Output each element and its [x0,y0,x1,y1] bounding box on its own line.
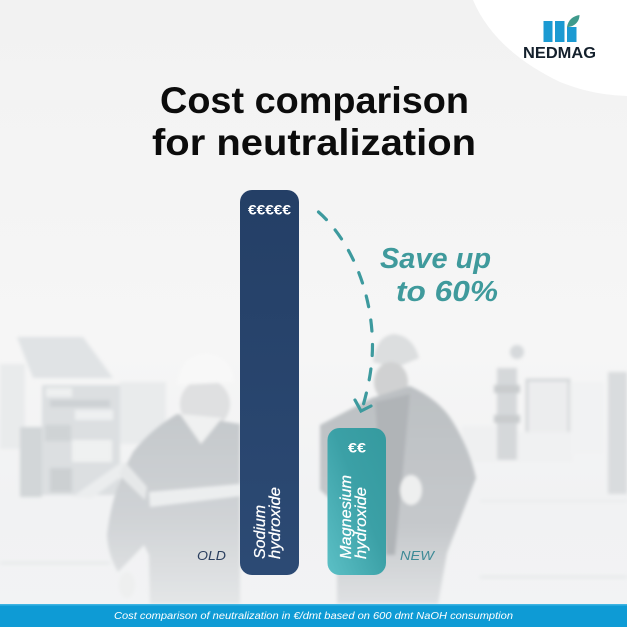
title: for neutralization [152,122,476,163]
arrow: dashed curve from old to new [318,212,372,411]
title: Cost comparison [160,80,469,121]
photo: right plant equipment [462,345,627,494]
white corner panel with logo [473,0,627,96]
footnote: Cost comparison of neutralization in €/dmt based on 600 dmt NaOH consumption [114,611,513,622]
bar label [338,475,370,559]
bar label: hydroxide [267,487,284,559]
callout: save up to 60%: to 60% [396,276,498,308]
background photo: industrial site with two workers [0,334,627,604]
label: new: NEW [400,548,436,563]
callout: save up to 60% [380,243,498,308]
bar label: hydroxide [353,487,370,559]
bar label: Magnesium [338,475,355,559]
label: old: OLD [197,548,226,563]
icon: Nedmag logo mark [544,15,580,42]
bar: sodium hydroxide (old) [240,190,299,575]
photo: ground [0,500,627,578]
title [152,80,476,163]
photo: worker right [320,334,476,604]
bar label [252,487,284,559]
bar label: Sodium [252,505,269,559]
callout: save up to 60%: Save up [380,243,491,275]
arrowhead [355,400,371,411]
photo: worker left [107,353,240,604]
bar value: €€€€€ [248,202,292,218]
photo: left plant buildings [0,337,166,498]
footer band [0,604,627,627]
bar: magnesium hydroxide (new) [328,428,386,575]
corner panel [473,0,627,96]
logo wordmark: NEDMAG [523,45,596,62]
bar value: €€ [348,440,367,456]
